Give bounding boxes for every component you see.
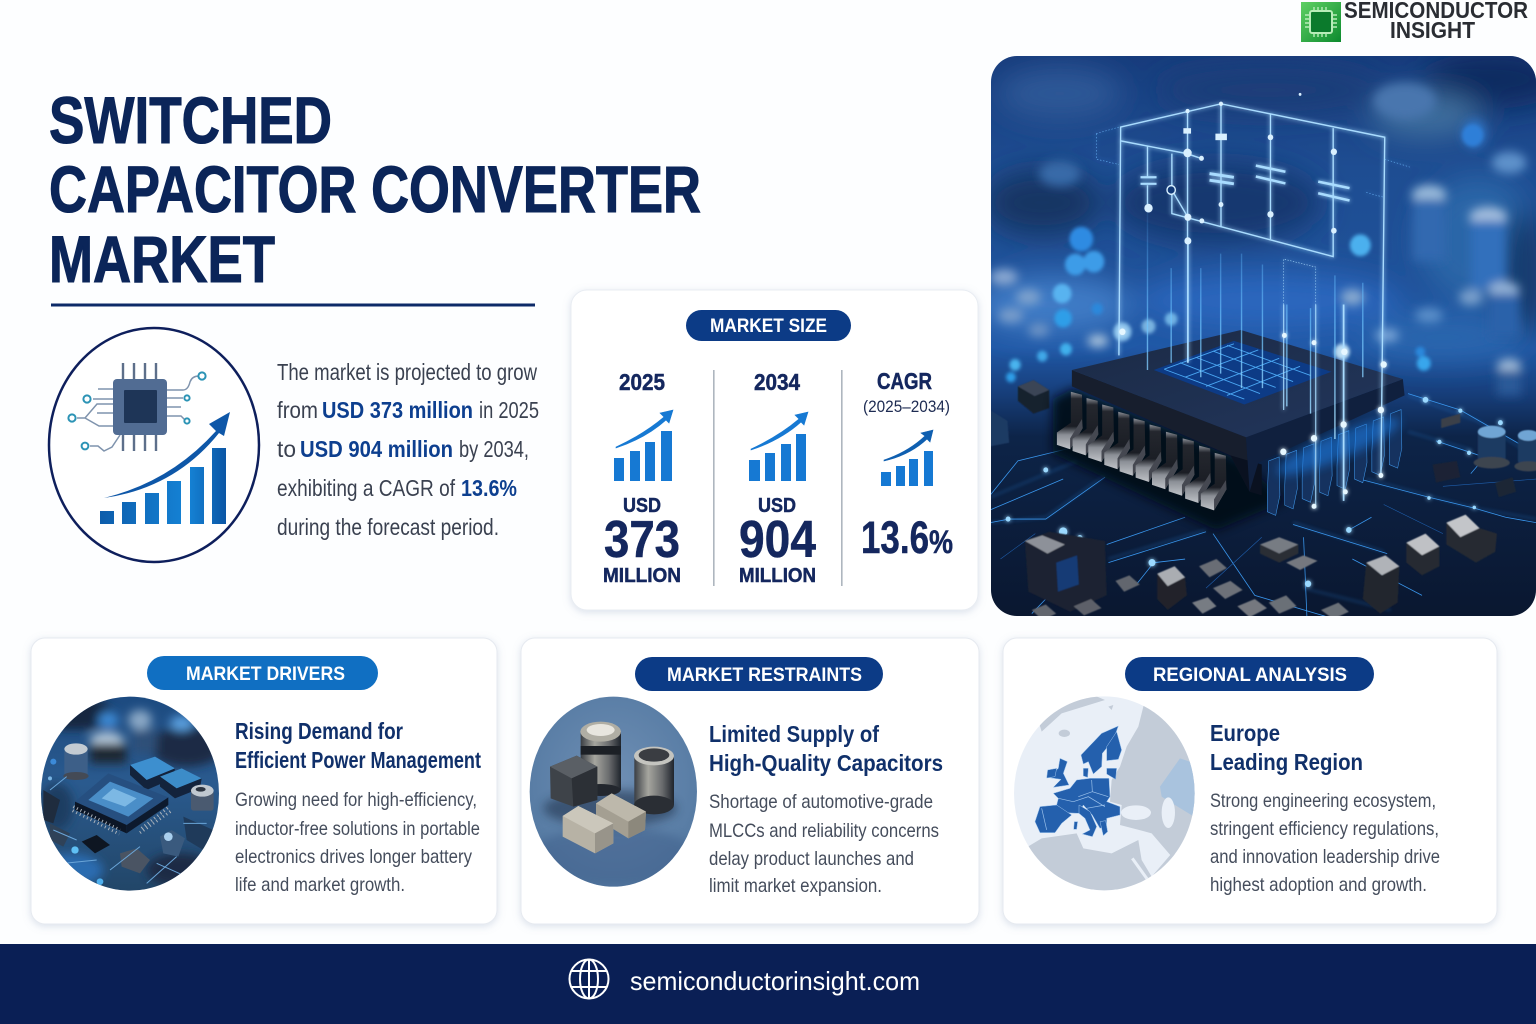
chip pins, left side [1057,392,1227,510]
text block: market projection: The market is projected to grow [277,359,538,385]
text: restraints description: limit market expansion. [709,875,882,897]
heading pill: market drivers: MARKET DRIVERS [186,663,345,685]
heading: limited supply: Limited Supply of [709,721,879,747]
footer url: semiconductorinsight.com [630,966,920,996]
text: regional description: stringent efficiency regulations, [1210,818,1439,840]
heading pill: market size: MARKET SIZE [710,315,827,337]
title: SWITCHED [49,83,332,157]
text block: market projection: to [277,436,296,462]
stat: CAGR: 13.6 [861,512,929,563]
stat: 2034 [739,369,816,587]
chip body [1072,330,1405,495]
stat: CAGR: (2025–2034) [863,398,950,416]
text block: market projection [277,359,539,540]
stat: 2034: 2034 [754,369,800,395]
text block: market projection: USD 373 million [322,397,473,423]
heading pill: market restraints: MARKET RESTRAINTS [667,664,862,686]
text: drivers description: life and market growth. [235,874,405,896]
text: drivers description: electronics drives longer battery [235,846,472,868]
panel: regional analysis [1003,638,1497,924]
footer bar [0,944,1536,1024]
text: restraints description: Shortage of automotive-grade [709,791,933,813]
panel: market drivers [31,638,497,924]
background bokeh [973,50,1536,359]
text block: market projection: from [277,397,318,423]
heading: limited supply [709,721,943,776]
stat: 2034: USD [758,494,796,517]
text: drivers description [235,789,480,896]
icon: green chip logo [1301,2,1341,42]
text: regional description [1210,790,1440,896]
photo: capacitors [527,695,700,888]
icon: chip with growth chart in circle [49,328,259,562]
icon: growth chart 2025 [614,410,673,481]
title: MARKET [49,222,275,296]
map: Europe on globe [1014,696,1195,890]
panel: market size [571,290,978,610]
stat: 2025: USD [623,494,661,517]
title [49,83,701,296]
board dots [1006,397,1503,587]
title: CAPACITOR CONVERTER [49,152,701,226]
heading pill: market restraints [635,657,883,691]
stat: 2025: MILLION [603,564,681,587]
text: restraints description: delay product launches and [709,848,914,870]
heading: rising demand: Efficient Power Management [235,747,481,773]
text: drivers description: Growing need for high-efficiency, [235,789,477,811]
stat: 2034: 904 [739,511,816,569]
icon: globe [570,960,608,998]
stat: 2025 [603,369,681,587]
text block: market projection: by 2034, [459,436,529,462]
hero image: chip with holographic circuit [973,50,1536,620]
text block: market projection: in 2025 [479,397,539,423]
text: drivers description: inductor-free solutions in portable [235,818,480,840]
text: regional description: Strong engineering ecosystem, [1210,790,1436,812]
board traces [990,395,1536,610]
heading: Europe: Leading Region [1210,749,1363,775]
photo: circuit board [33,695,223,892]
text: restraints description: MLCCs and reliability concerns [709,820,939,842]
heading pill: regional analysis: REGIONAL ANALYSIS [1153,664,1347,686]
heading pill: market size [686,310,851,341]
stat: 2025: 373 [604,511,680,569]
heading pill: regional analysis [1125,657,1374,691]
stat: CAGR: % [929,524,953,560]
text block: market projection: USD 904 million [300,436,453,462]
stat: CAGR [861,368,953,563]
text: regional description: and innovation leadership drive [1210,846,1440,868]
panel: market restraints [521,638,979,924]
logo: Semiconductor Insight [1301,0,1528,43]
heading: limited supply: High-Quality Capacitors [709,750,943,776]
chip pins, right side glowing [1267,410,1402,515]
icon: growth chart CAGR [881,430,933,486]
text block: market projection: 13.6% [461,475,517,501]
heading: rising demand: Rising Demand for [235,718,403,744]
text: restraints description [709,791,939,897]
heading pill: market drivers [147,656,378,690]
stat: CAGR: CAGR [877,368,932,394]
text block: market projection: exhibiting a CAGR of [277,475,455,501]
heading: Europe [1210,720,1363,775]
heading: Europe: Europe [1210,720,1280,746]
holographic circuit [1096,104,1410,508]
icon: growth chart 2034 [749,412,808,481]
logo: Semiconductor Insight: INSIGHT [1390,17,1475,43]
text: regional description: highest adoption and growth. [1210,874,1427,896]
text block: market projection: during the forecast period. [277,514,499,540]
stat: 2025: 2025 [619,369,665,395]
heading: rising demand [235,718,481,773]
hologram beams [1147,210,1363,439]
stat: 2034: MILLION [739,564,816,587]
bottom components [990,380,1536,620]
